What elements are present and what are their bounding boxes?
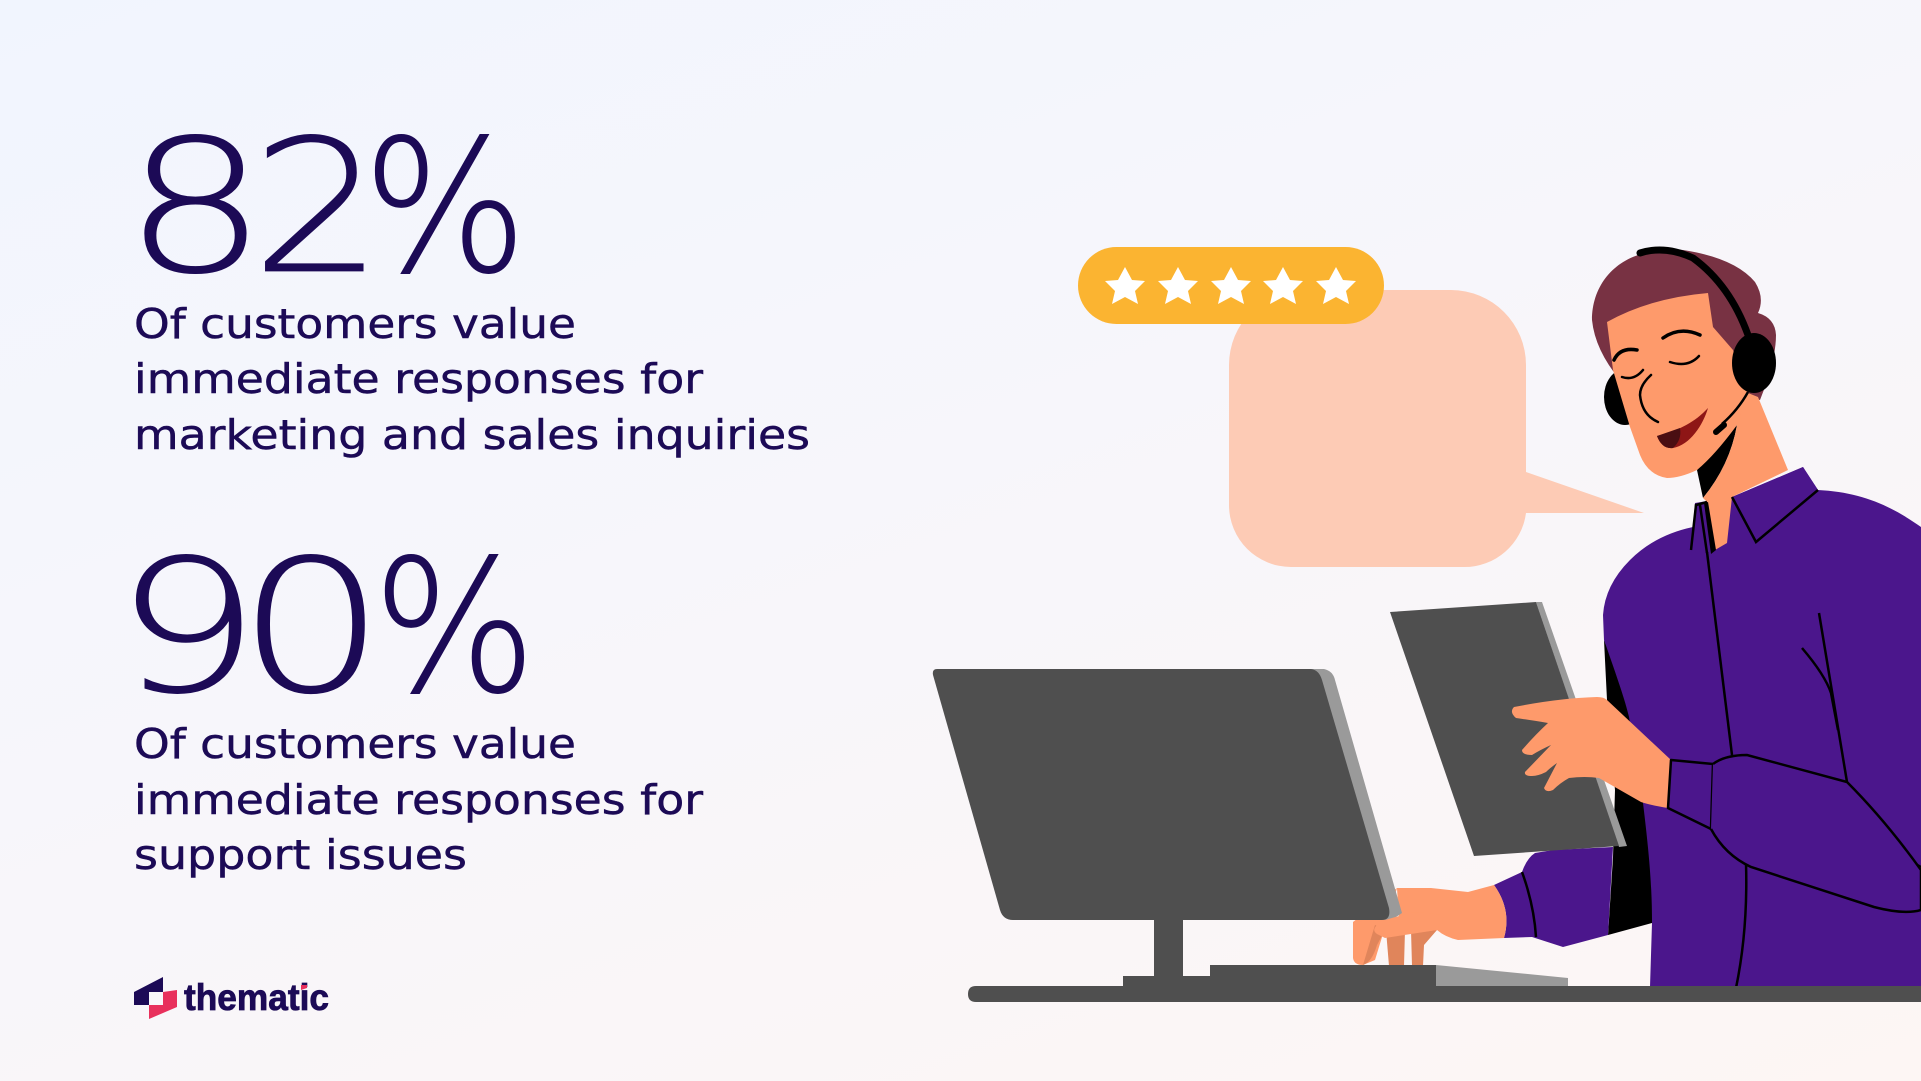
stat 1 description: immediate responses for: [134, 355, 703, 403]
face: [1607, 293, 1748, 478]
shirt torso: [1603, 467, 1921, 987]
stat 2: 90%: 0: [237, 521, 386, 735]
stat 2: 90%: 9: [114, 521, 261, 735]
placket: [1691, 502, 1707, 553]
speech bubble: [1229, 290, 1644, 567]
mouth: [1657, 408, 1708, 448]
logo: thematic: thematic: [184, 977, 329, 1018]
desk: [968, 986, 1921, 1002]
far arm sleeve: [1494, 847, 1613, 947]
facial features: [1614, 331, 1700, 422]
near sleeve with cuff: [1668, 755, 1921, 912]
stat 2 description: [134, 720, 703, 879]
stat 1: 82%: [124, 101, 810, 459]
monitor: [933, 669, 1402, 988]
stat 1 description: [134, 300, 810, 459]
hair: [1592, 249, 1776, 400]
keyboard: [1210, 965, 1568, 987]
stat 1: 82%: %: [362, 101, 528, 315]
stat 2 description: support issues: [134, 831, 467, 879]
stat 2: 90%: %: [372, 521, 536, 735]
stat 1 description: marketing and sales inquiries: [134, 411, 810, 459]
holding hand: [1512, 697, 1671, 808]
rating pill with five stars: [1078, 247, 1384, 324]
headset: [1640, 250, 1776, 432]
stat 1: 82%: 8: [124, 101, 268, 315]
collar: [1732, 467, 1818, 542]
stat 1 description: Of customers value: [134, 300, 576, 348]
chair / shadow behind torso: [1604, 640, 1652, 935]
agent illustration: [933, 249, 1921, 1002]
front finger over monitor: [1374, 912, 1445, 938]
shirt fold lines: [1707, 552, 1921, 988]
stat 2: 90%: [114, 521, 703, 879]
tablet: [1390, 602, 1627, 856]
neck shadow: [1697, 425, 1737, 498]
left ear cup: [1604, 369, 1646, 425]
neck: [1703, 393, 1788, 550]
stat 2 description: immediate responses for: [134, 776, 703, 824]
typing hand: [1353, 885, 1506, 966]
head: [1592, 249, 1818, 554]
stat 2 description: Of customers value: [134, 720, 576, 768]
stat 1: 82%: 2: [251, 101, 384, 315]
